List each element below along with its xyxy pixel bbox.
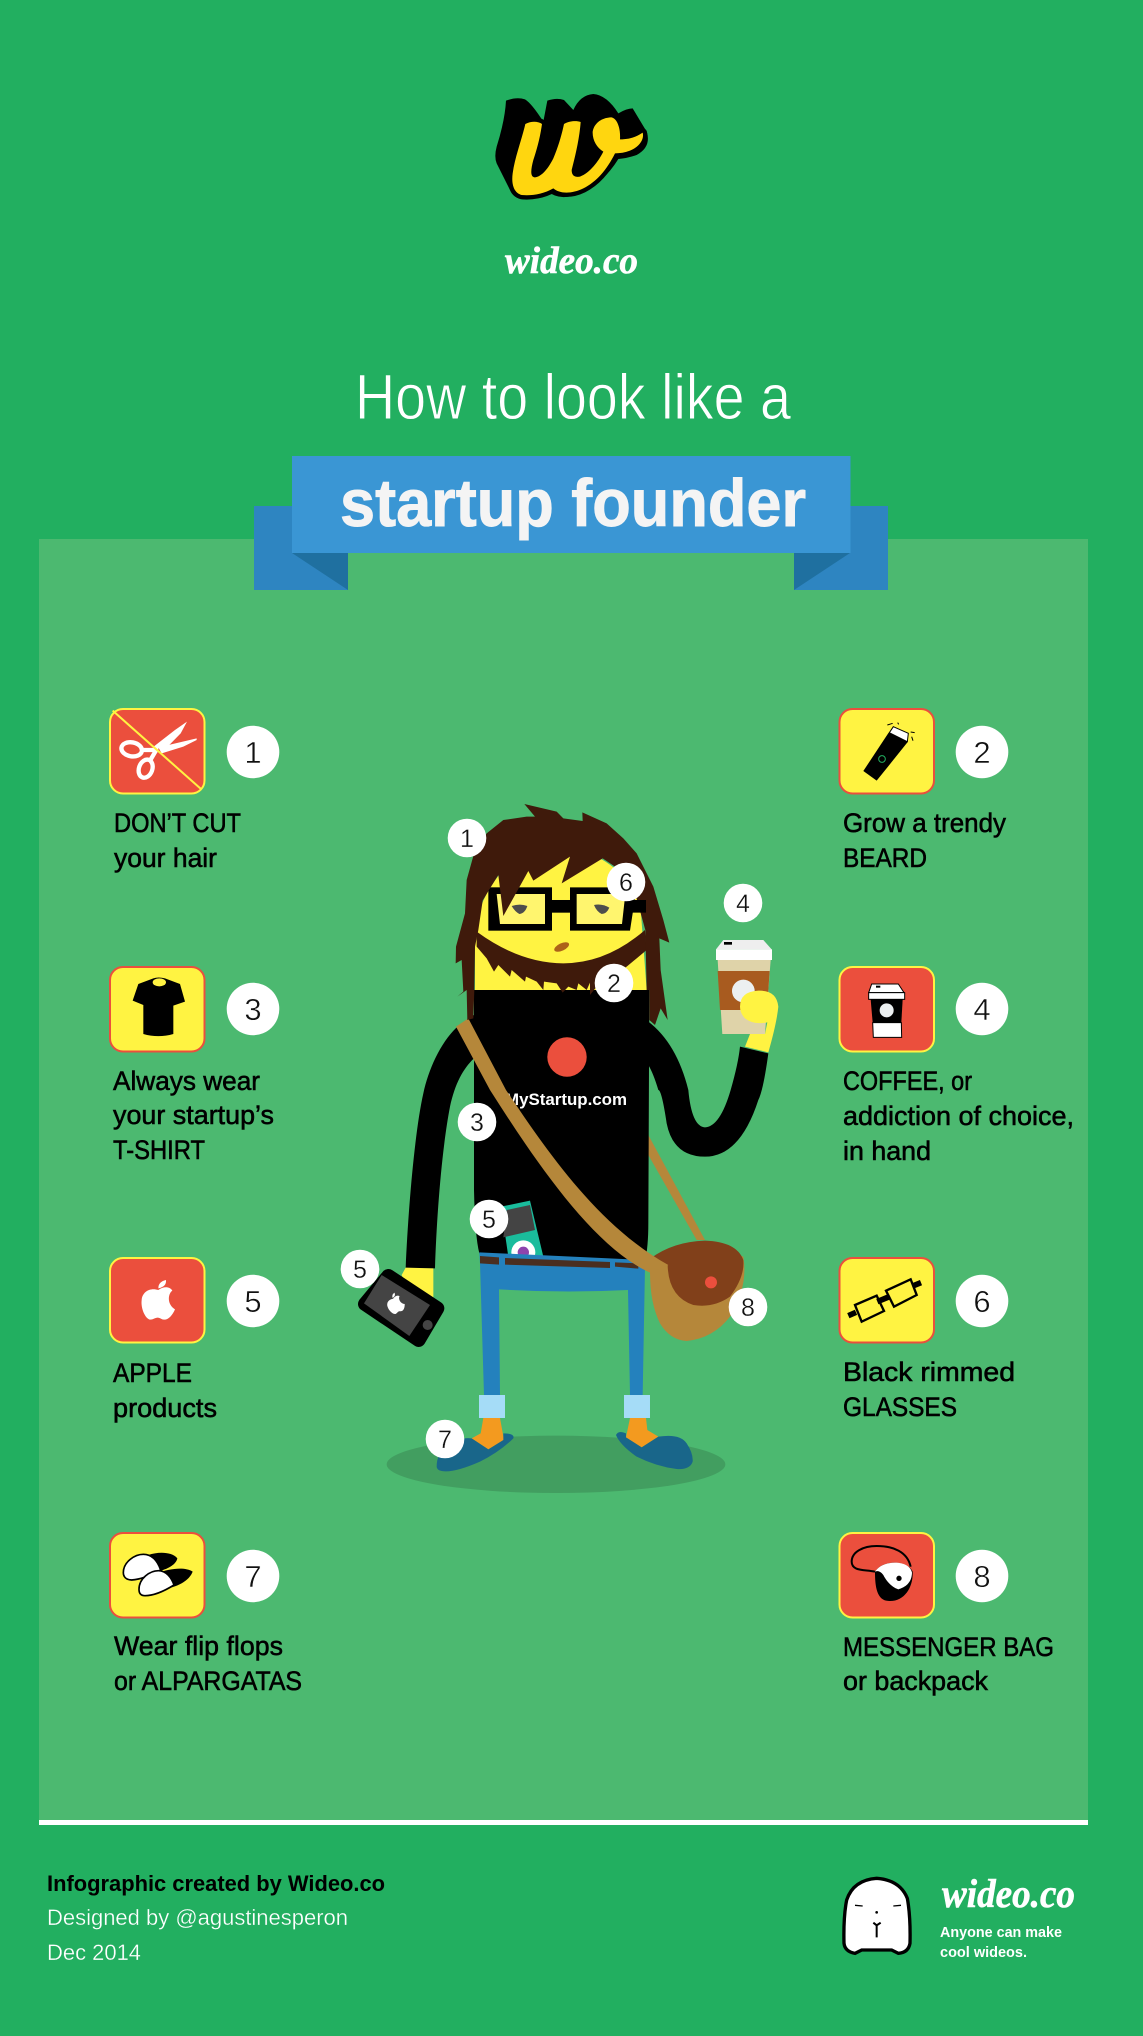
logo: wideo W mark [495,94,648,199]
callout numbers on the figure: 4 [736,890,750,918]
messenger bag with strap [456,1018,744,1341]
logo text: wideo.co: wideo.co [505,240,638,282]
item 2: grow a trendy beard: BEARD [843,843,927,873]
item 6: black rimmed glasses [840,1258,1015,1422]
item 7: flip flops or alpargatas: Wear flip flops [114,1631,283,1661]
item 7: flip flops or alpargatas: 7 [244,1559,262,1594]
item 4: coffee in hand [840,967,1074,1166]
callout numbers on the figure: 5 [353,1256,367,1284]
panel: main content background [39,539,1088,1820]
item 1: don't cut your hair: DON’T CUT [114,808,241,838]
callout numbers on the figure: 2 [607,970,621,998]
item 8: messenger bag or backpack: or backpack [843,1666,989,1696]
item 2: grow a trendy beard: Grow a trendy [843,808,1007,838]
item 8: messenger bag or backpack: 8 [973,1559,991,1594]
footer brand and tagline: Anyone can make [940,1925,1062,1941]
callout numbers on the figure: 1 [460,825,474,853]
title: How to look like a: How to look like a [355,361,791,433]
callout numbers on the figure [341,819,767,1458]
lower body: torso, arms, legs, feet [402,990,768,1471]
item 4: coffee in hand: in hand [843,1136,931,1166]
callout numbers on the figure: 7 [438,1426,452,1454]
t-shirt chest logo and text [505,1037,627,1109]
item 4: coffee in hand: COFFEE, or [843,1066,972,1096]
footer brand and tagline: wideo.co [942,1871,1075,1916]
item 3: always wear your startup's t-shirt: T-SHIRT [113,1135,205,1165]
item 3: always wear your startup's t-shirt: Always wear [113,1066,260,1096]
item 6: black rimmed glasses: 6 [973,1284,991,1319]
footer brand and tagline [940,1871,1075,1961]
item 3: always wear your startup's t-shirt [110,967,279,1165]
footer credits: Dec 2014 [47,1940,141,1965]
item 2: grow a trendy beard: 2 [973,735,991,770]
item 1: don't cut your hair [110,709,279,873]
smartphone [364,1275,437,1340]
item 8: messenger bag or backpack [840,1533,1054,1696]
coffee cup and raised hand [716,940,778,1052]
item 3: always wear your startup's t-shirt: 3 [244,992,262,1027]
item 7: flip flops or alpargatas [110,1533,302,1696]
t-shirt chest logo and text: MyStartup.com [505,1090,627,1109]
item 5: apple products: APPLE [113,1358,192,1388]
item 5: apple products [110,1258,279,1423]
item 2: grow a trendy beard [840,709,1008,873]
callout numbers on the figure: 3 [470,1109,484,1137]
footer credits [47,1871,385,1965]
item 3: always wear your startup's t-shirt: your startup’s [113,1100,274,1130]
footer credits: Infographic created by Wideo.co [47,1871,385,1896]
footer credits: Designed by @agustinesperon [47,1905,348,1930]
banner: startup founder ribbon [254,456,888,590]
item 6: black rimmed glasses: GLASSES [843,1392,957,1422]
item 1: don't cut your hair: your hair [114,843,217,873]
head: face, beard, glasses, hair [456,804,669,1025]
footer brand and tagline: cool wideos. [940,1945,1027,1961]
ground shadow [387,1436,725,1493]
item 4: coffee in hand: 4 [973,992,991,1027]
footer mascot [844,1878,910,1953]
item 4: coffee in hand: addiction of choice, [843,1101,1074,1131]
banner: startup founder ribbon: startup founder [340,466,806,541]
callout numbers on the figure: 5 [482,1206,496,1234]
item 8: messenger bag or backpack: MESSENGER BAG [843,1632,1054,1662]
item 7: flip flops or alpargatas: or ALPARGATAS [114,1666,302,1696]
item 5: apple products: products [113,1393,217,1423]
item 5: apple products: 5 [244,1284,262,1319]
callout numbers on the figure: 8 [741,1294,755,1322]
item 1: don't cut your hair: 1 [244,735,262,770]
character: startup founder illustration [341,804,778,1493]
item 6: black rimmed glasses: Black rimmed [843,1357,1015,1387]
callout numbers on the figure: 6 [619,869,633,897]
